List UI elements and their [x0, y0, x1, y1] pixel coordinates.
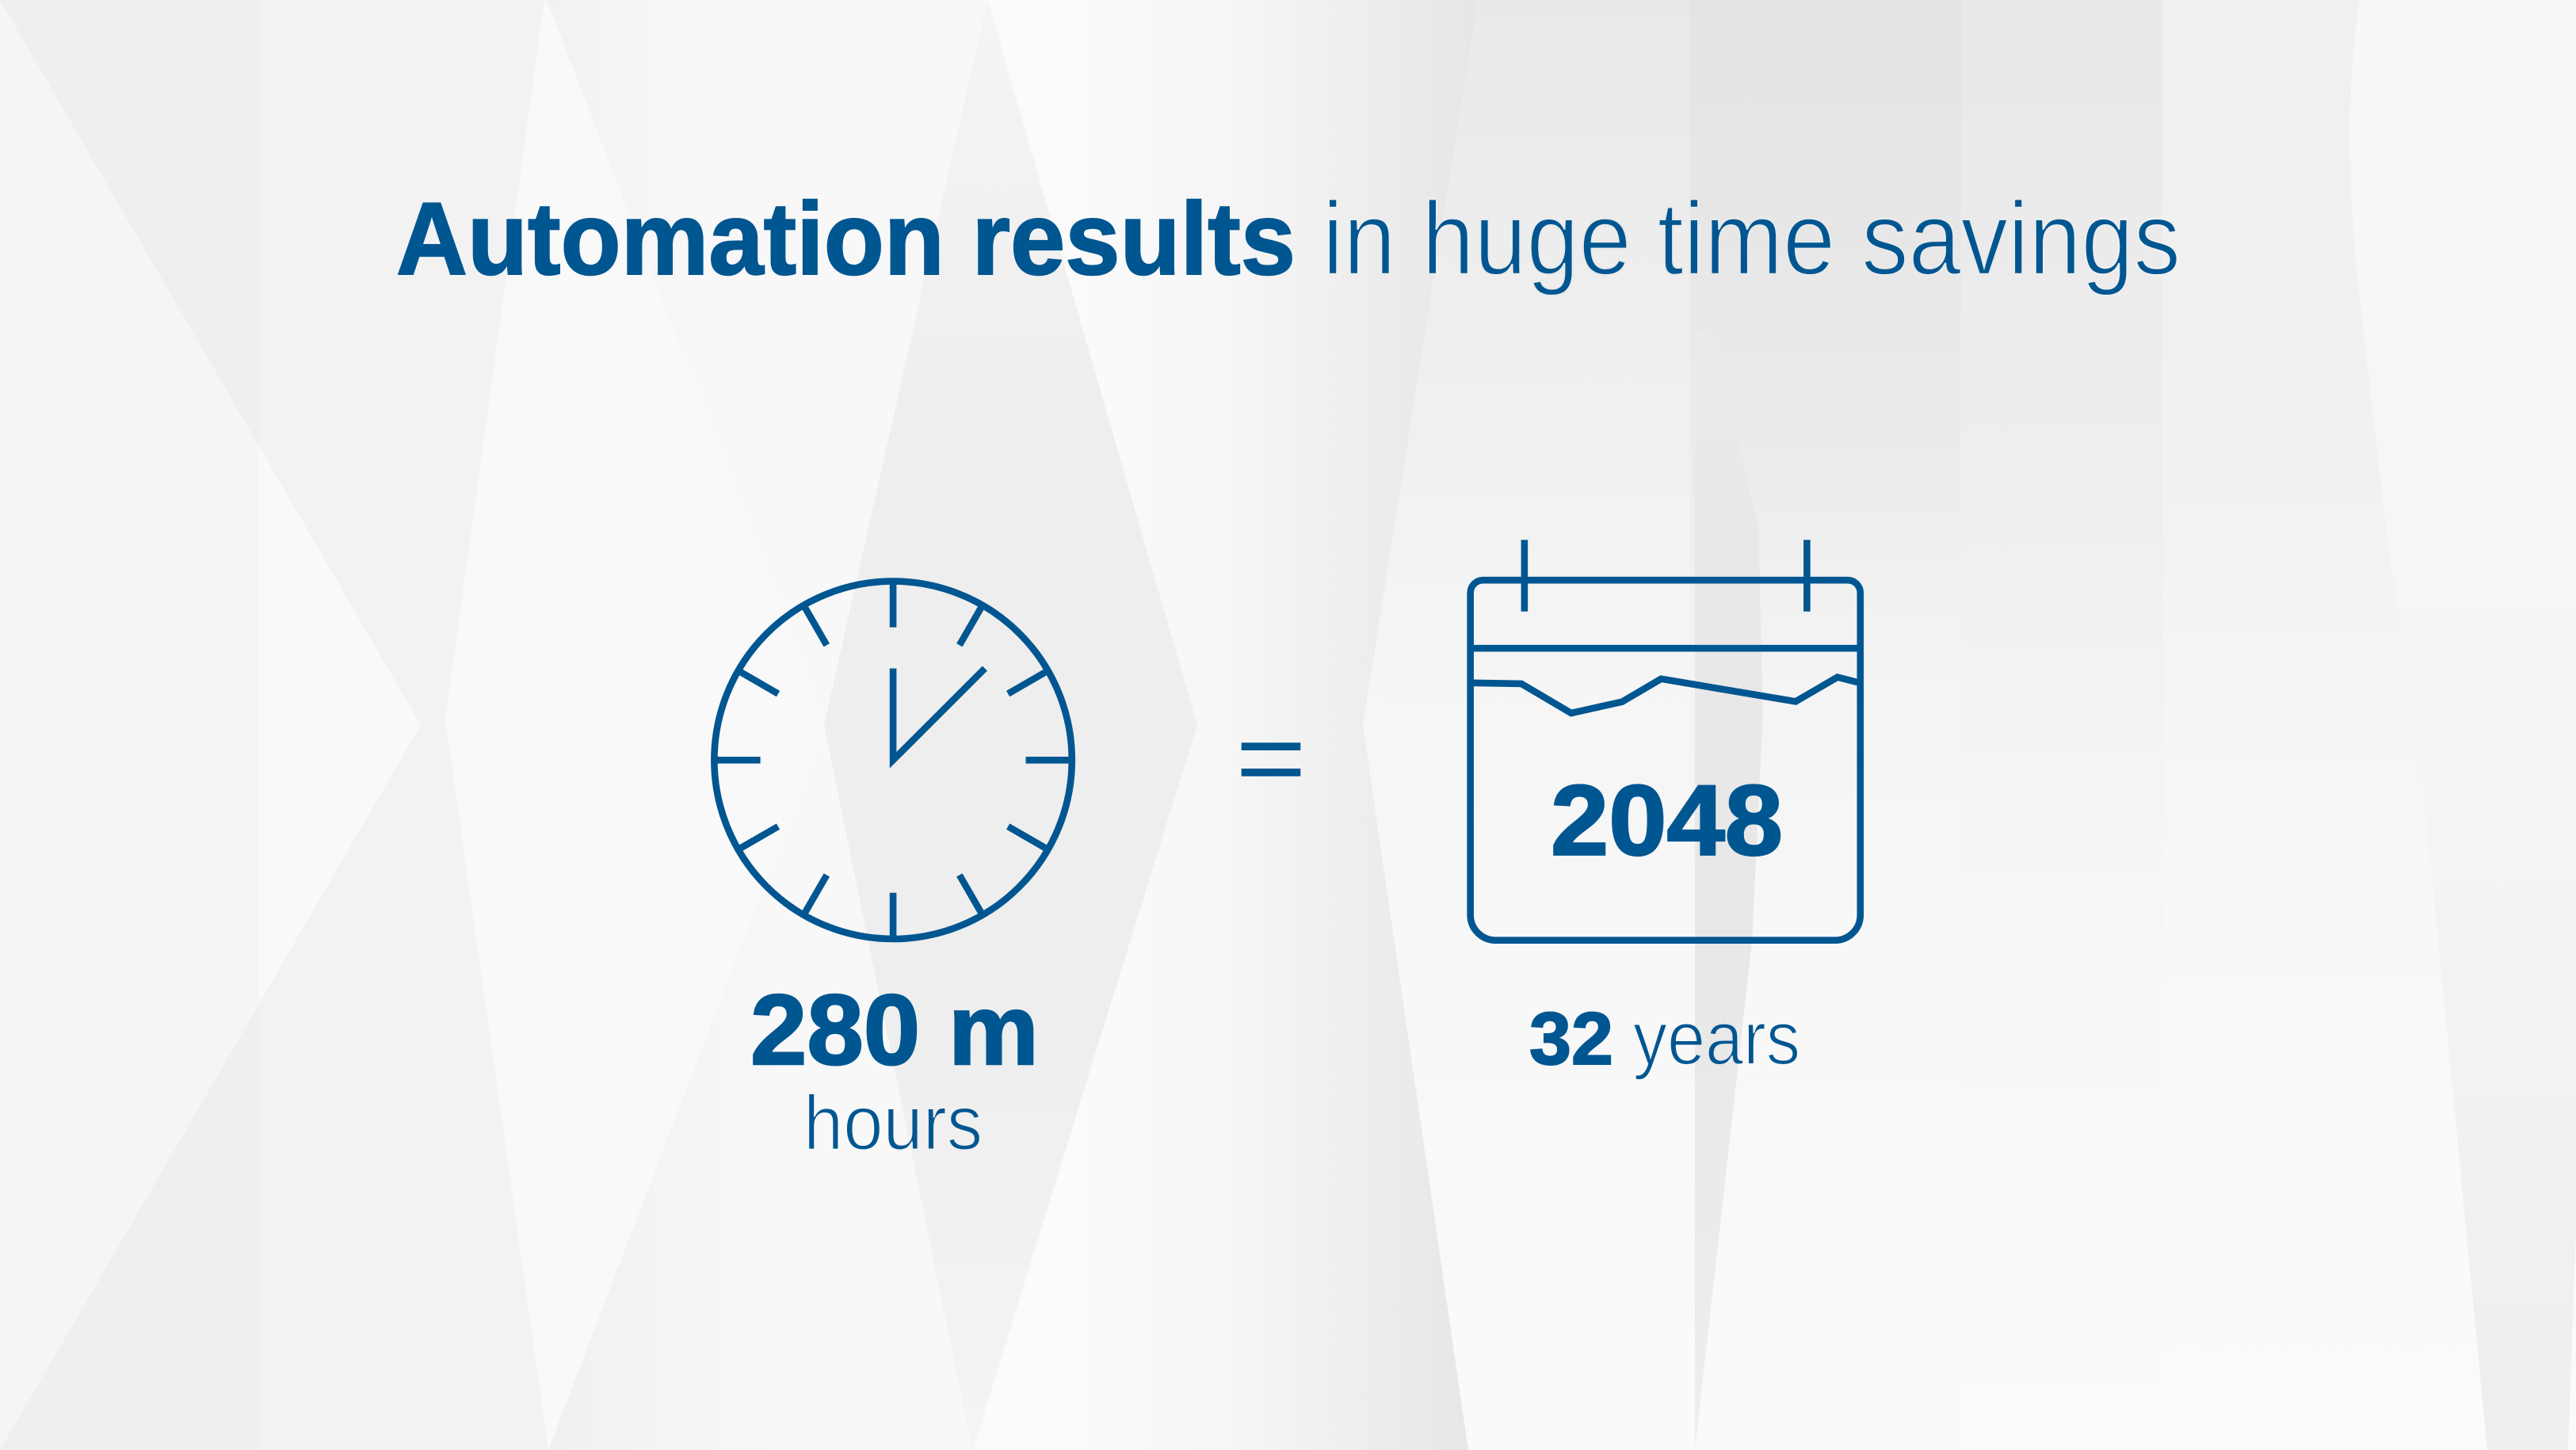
calendar header line — [1471, 645, 1860, 652]
label: 32 years — [1529, 996, 1800, 1081]
calendar binding pins — [1525, 540, 1807, 612]
icon: clock — [714, 582, 1072, 939]
unit: years: years — [1633, 996, 1800, 1081]
clock hands — [893, 669, 985, 760]
calendar outline — [1471, 580, 1860, 941]
title: light part: in huge time savings — [1322, 180, 2181, 296]
label: 280 m hours — [750, 974, 1039, 1166]
title: bold part: Automation results — [396, 181, 1296, 296]
clock face — [714, 582, 1072, 939]
clock hour ticks — [714, 582, 1072, 939]
title — [396, 180, 2181, 296]
icon: calendar — [1471, 540, 1860, 941]
equals sign — [1242, 742, 1300, 777]
value: 32: 32 — [1529, 997, 1613, 1080]
calendar year: 2048 — [1551, 765, 1783, 876]
value: 280 m: 280 m — [750, 974, 1039, 1086]
calendar torn page edge — [1471, 677, 1860, 713]
unit: hours: hours — [803, 1080, 983, 1166]
